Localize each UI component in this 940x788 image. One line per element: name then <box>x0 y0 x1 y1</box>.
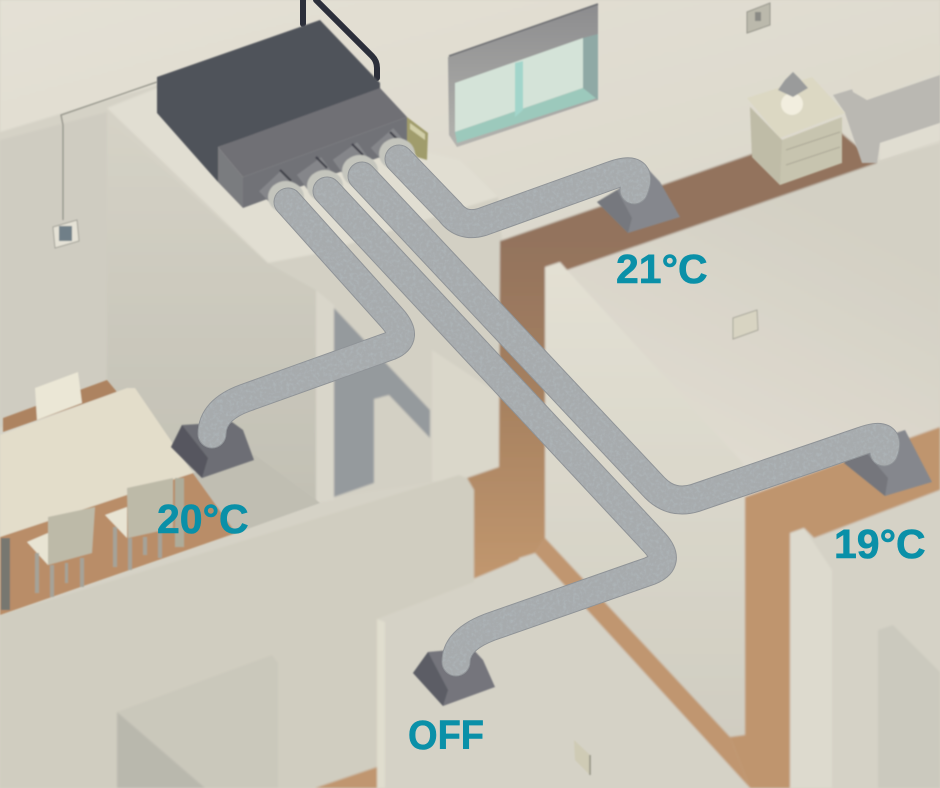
right wall block <box>790 490 940 788</box>
control box <box>407 117 428 160</box>
dining room wall <box>0 112 107 428</box>
concrete pillar <box>334 308 430 497</box>
plenum box top <box>218 88 407 177</box>
indoor fan coil unit <box>157 20 428 208</box>
ceiling beam under unit <box>107 88 498 263</box>
large left wall <box>107 118 316 503</box>
dining table with chairs <box>0 372 320 615</box>
window <box>448 4 598 147</box>
plenum box front face <box>243 117 407 208</box>
label: 20C: 20°C <box>157 496 249 542</box>
left chair <box>27 533 48 565</box>
bottom centre wall block <box>377 553 750 788</box>
wall outlet: upper right <box>747 3 770 33</box>
air outlet: OFF room <box>413 648 495 706</box>
table legs <box>175 478 184 547</box>
front floor patch <box>0 473 236 615</box>
right chair <box>105 507 127 538</box>
table top <box>0 388 193 537</box>
label: OFF: OFF <box>408 712 484 758</box>
shadow on wall by table <box>193 455 320 533</box>
back chair <box>35 372 82 420</box>
air outlet: 20C room <box>171 422 254 478</box>
refrigerant pipes <box>303 0 377 78</box>
central wall left face <box>545 262 745 737</box>
flexible duct: 20C <box>212 202 401 434</box>
air outlet: 21C room <box>597 168 680 233</box>
unit body top <box>157 20 380 182</box>
back floor patch <box>3 380 117 432</box>
light wall right of pillar <box>432 350 500 482</box>
upper bedroom wall and ceiling <box>0 0 940 260</box>
wall behind pillar <box>268 197 502 503</box>
central room wall <box>567 143 940 497</box>
bed <box>833 43 940 163</box>
label: 21C: 21°C <box>616 246 708 292</box>
bedside table with lamp <box>747 72 845 185</box>
flexible duct: OFF <box>327 191 662 662</box>
flexible duct: 21C <box>399 159 637 224</box>
wall thermostat: left room <box>53 82 157 248</box>
duct collars <box>268 132 415 213</box>
wall switch: bottom <box>574 740 590 775</box>
label: 19C: 19°C <box>834 521 926 567</box>
bottom left wall block <box>0 475 474 788</box>
air outlet: 19C room <box>844 430 932 496</box>
diagonal floor strip <box>535 538 750 788</box>
flexible duct: 19C <box>362 176 886 500</box>
hallway floor <box>467 126 877 582</box>
plenum box left face <box>218 147 243 208</box>
right floor <box>730 427 940 788</box>
light wall strip <box>316 290 334 503</box>
wall switch: centre <box>733 310 758 339</box>
